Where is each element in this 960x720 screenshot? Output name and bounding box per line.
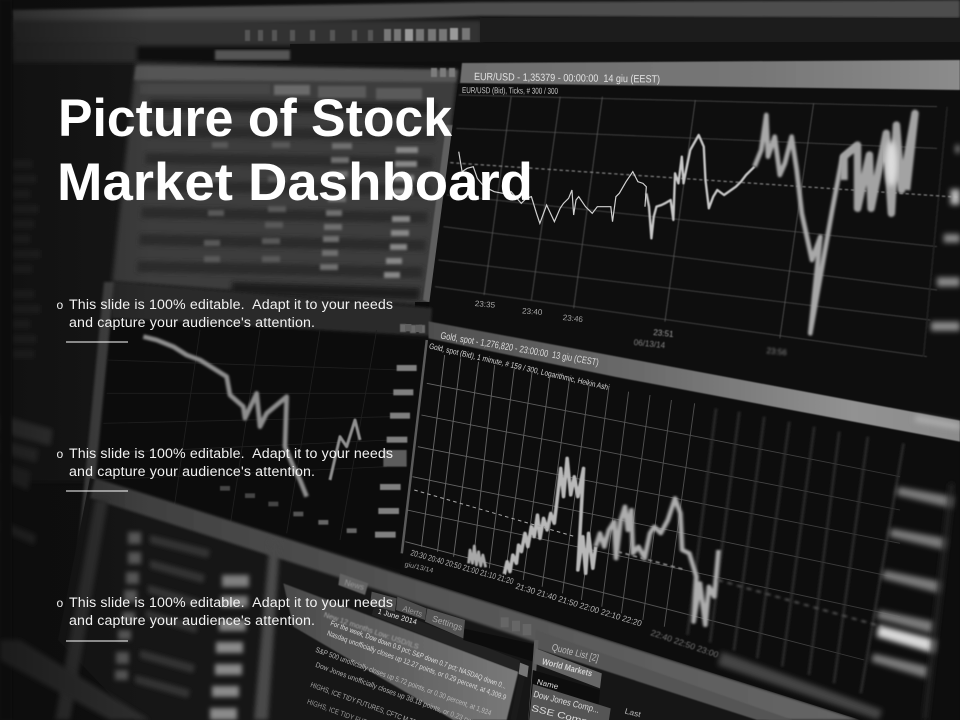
EUR/USD line chart: 23:46 [562,313,584,324]
EUR/USD line chart: 23:35 [474,299,496,310]
text block 2: This slide is 100% editable. Adapt it to your needs [69,446,393,462]
title [57,89,533,212]
panel: lower-left table with bright bars [0,478,860,720]
panel: blurred market table [112,62,458,314]
left chart frame [74,282,114,590]
text block 1: o [56,298,64,312]
gold time axis labels: giu/13/14 [404,561,434,575]
panel: monitor top bezel and toolbar [12,0,960,62]
tabs: news, alerts, settings: Settings [431,613,465,633]
text block 2 [56,446,393,492]
panel: EUR/USD chart window [427,60,960,420]
text block 3: and capture your audience's attention. [69,613,315,629]
title: Picture of Stock [58,89,453,148]
news headlines: 1 June 2014 [377,607,418,626]
news headlines: Nasdaq unofficially closes up 12.27 points, or 0.29 percent, at 4,309.9 [326,628,508,702]
gold time axis labels [404,548,720,660]
quote list labels [530,643,643,720]
EUR/USD line chart: 23:40 [522,306,543,317]
title bar: gold spot: Gold, spot - 1,276,820 - 23:00:00 13 giu (CEST) [439,331,600,369]
panel: quote list [529,630,793,720]
text block 2: o [56,447,64,461]
gold price labels [871,415,960,678]
title bar: EUR/USD [460,60,960,90]
gold time axis labels: 22:40 22:50 23:00 [649,628,720,660]
window buttons: news [501,617,531,635]
monitor left edge [0,0,12,720]
title: Market Dashboard [57,153,533,212]
quote list labels: Last [624,706,643,719]
chart subtitle: gold spot: Gold, spot (Bid), 1 minute, # 159 / 300, Logarithmic, Heikin Ashi [428,341,611,392]
panel: gold chart window [400,321,960,720]
news headlines [306,607,508,720]
panel: blurred left column [0,42,137,545]
quote list labels: Dow Jones Comp... [532,689,601,715]
news headlines: For the week, Dow down 0.9 pct; S&P down 0.7 pct; NASDAQ down 0... [329,618,508,691]
EUR/USD line chart: 23:56 [766,346,788,357]
gold time axis labels: 20:30 20:40 20:50 21:00 21:10 21:20 [409,548,515,586]
tabs: news, alerts, settings [338,573,465,638]
quote list labels: Quote List [2] [550,643,600,664]
text block 3: o [56,596,64,610]
gold grid [405,355,900,660]
chart subtitle: EUR/USD: EUR/USD (Bid), Ticks, # 300 / 300 [462,85,558,96]
tabs: news, alerts, settings: News [343,578,365,592]
gold chart frame [402,340,427,553]
tabs: news, alerts, settings: Alerts [401,604,424,619]
EUR/USD line chart: 06/13/14 [633,338,666,350]
title bar: EUR/USD: EUR/USD - 1,35379 - 00:00:00 14 giu (EEST) [474,71,660,86]
quote list labels: World Markets [541,657,594,678]
text block 3: This slide is 100% editable. Adapt it to your needs [69,595,393,611]
news headlines: New 12 months Low: USD/ILS [323,610,420,651]
window buttons: gold [405,324,422,332]
downtrend candles [143,337,307,497]
text block 2: and capture your audience's attention. [69,464,315,480]
text block 1: and capture your audience's attention. [69,315,315,331]
EUR/USD line chart [435,95,960,357]
gold time axis labels: 21:30 21:40 21:50 22:00 22:10 22:20 [514,581,643,628]
text block 3 [56,595,393,642]
EUR/USD line chart: 23:51 [653,328,675,339]
panel: news window [283,573,533,720]
text block 1 [56,297,393,342]
panel: lower-left chart window [74,282,432,590]
text block 1: This slide is 100% editable. Adapt it to your needs [69,297,393,313]
left shading overlay [0,0,150,720]
quote list labels: Name [536,677,560,691]
title bar: gold spot [429,321,960,442]
gold candlestick chart [469,458,719,625]
